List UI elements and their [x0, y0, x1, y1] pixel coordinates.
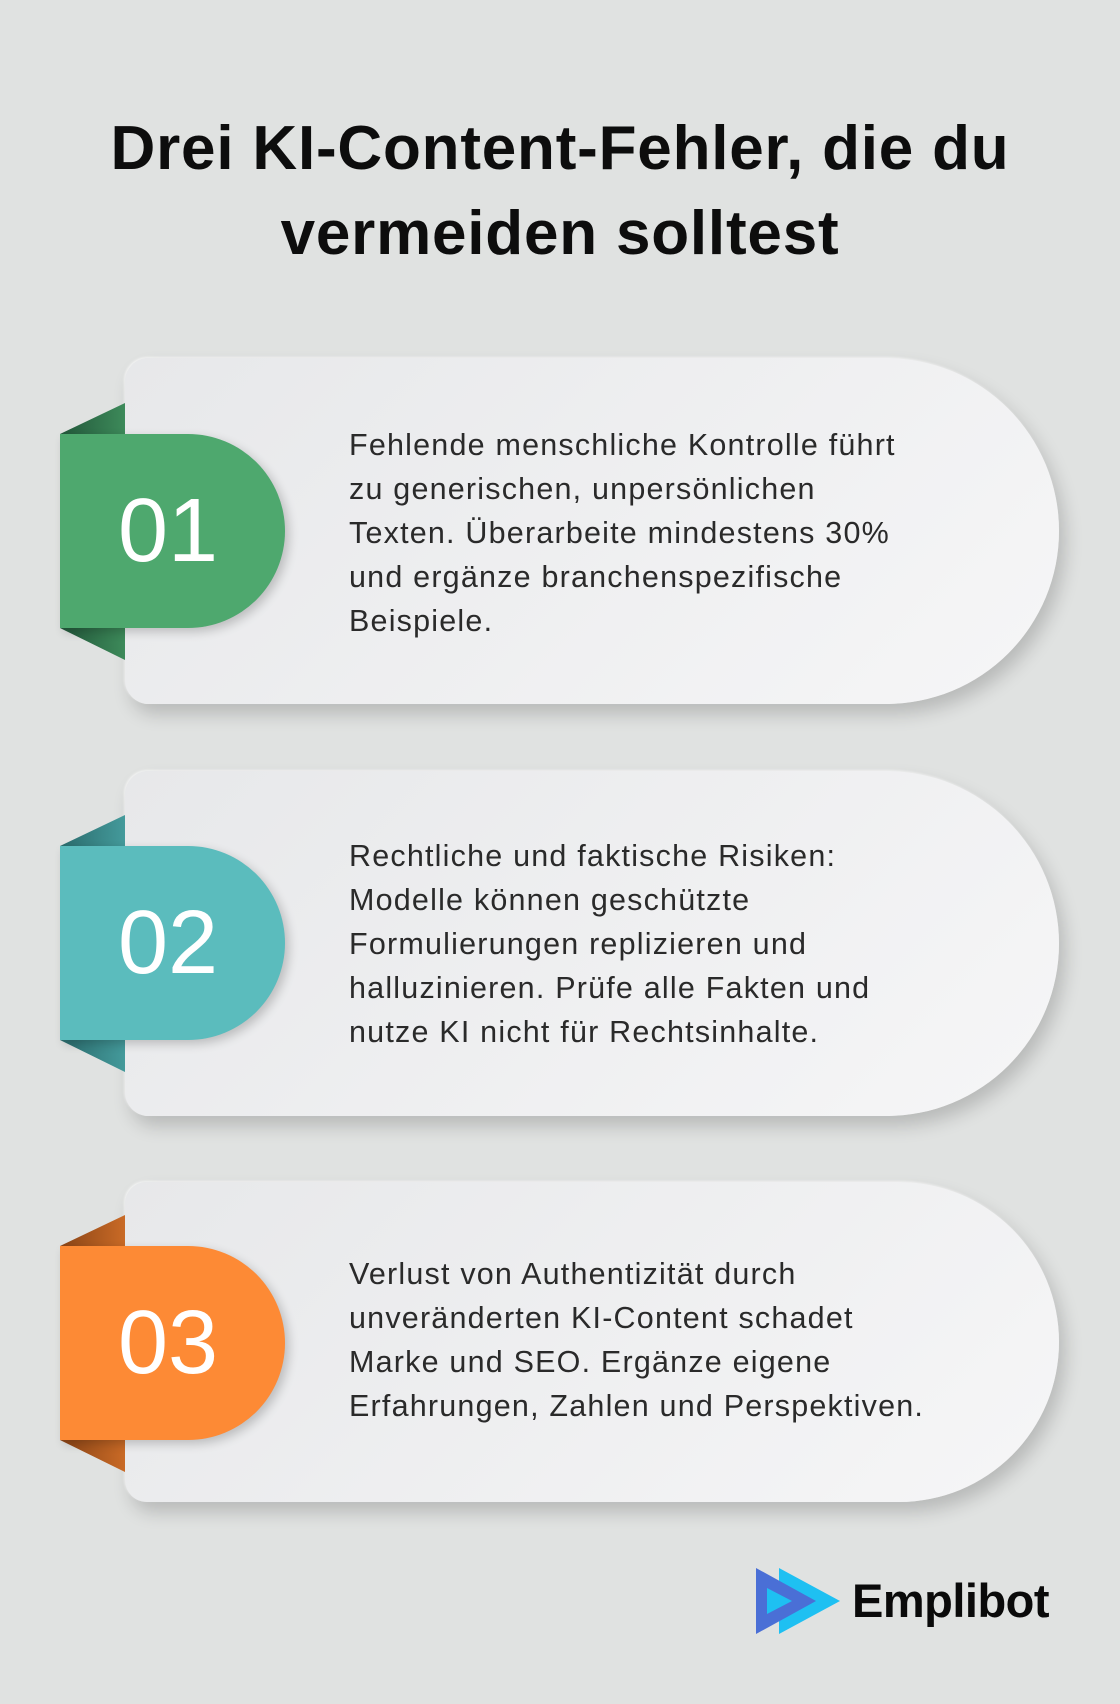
text 3 — [349, 1257, 924, 1423]
text 1: Texten. Überarbeite mindestens 30% — [349, 516, 890, 550]
panel: card 2 — [125, 771, 1059, 1116]
text 3: unveränderten KI-Content schadet — [349, 1301, 854, 1335]
text 3: Marke und SEO. Ergänze eigene — [349, 1345, 831, 1379]
text 1: Fehlende menschliche Kontrolle führt — [349, 428, 896, 462]
logo text: Emplibot — [852, 1574, 1049, 1627]
text 2: halluzinieren. Prüfe alle Fakten und — [349, 971, 870, 1005]
logo: Emplibot — [756, 1568, 1049, 1634]
panel: card 1 — [125, 358, 1059, 704]
panel: card 3 — [125, 1182, 1059, 1502]
badge 3 — [60, 1215, 294, 1472]
text 2: nutze KI nicht für Rechtsinhalte. — [349, 1015, 819, 1049]
text 2: Formulierungen replizieren und — [349, 927, 807, 961]
badge 1: 01 — [118, 481, 218, 581]
title — [111, 114, 1009, 268]
title: vermeiden solltest — [281, 199, 839, 268]
title: Drei KI-Content-Fehler, die du — [111, 114, 1009, 183]
text 2 — [349, 839, 870, 1049]
badge 2: 02 — [118, 893, 218, 993]
text 3: Erfahrungen, Zahlen und Perspektiven. — [349, 1389, 924, 1423]
icon: play arrows — [756, 1568, 840, 1634]
badge 2 — [60, 815, 294, 1072]
text 3: Verlust von Authentizität durch — [349, 1257, 797, 1291]
badge 3: 03 — [118, 1293, 218, 1393]
text 1: zu generischen, unpersönlichen — [349, 472, 816, 506]
badge 1 — [60, 403, 294, 660]
text 1 — [349, 428, 896, 638]
text 1: Beispiele. — [349, 604, 493, 638]
text 2: Rechtliche und faktische Risiken: — [349, 839, 836, 873]
text 1: und ergänze branchenspezifische — [349, 560, 842, 594]
text 2: Modelle können geschützte — [349, 883, 750, 917]
